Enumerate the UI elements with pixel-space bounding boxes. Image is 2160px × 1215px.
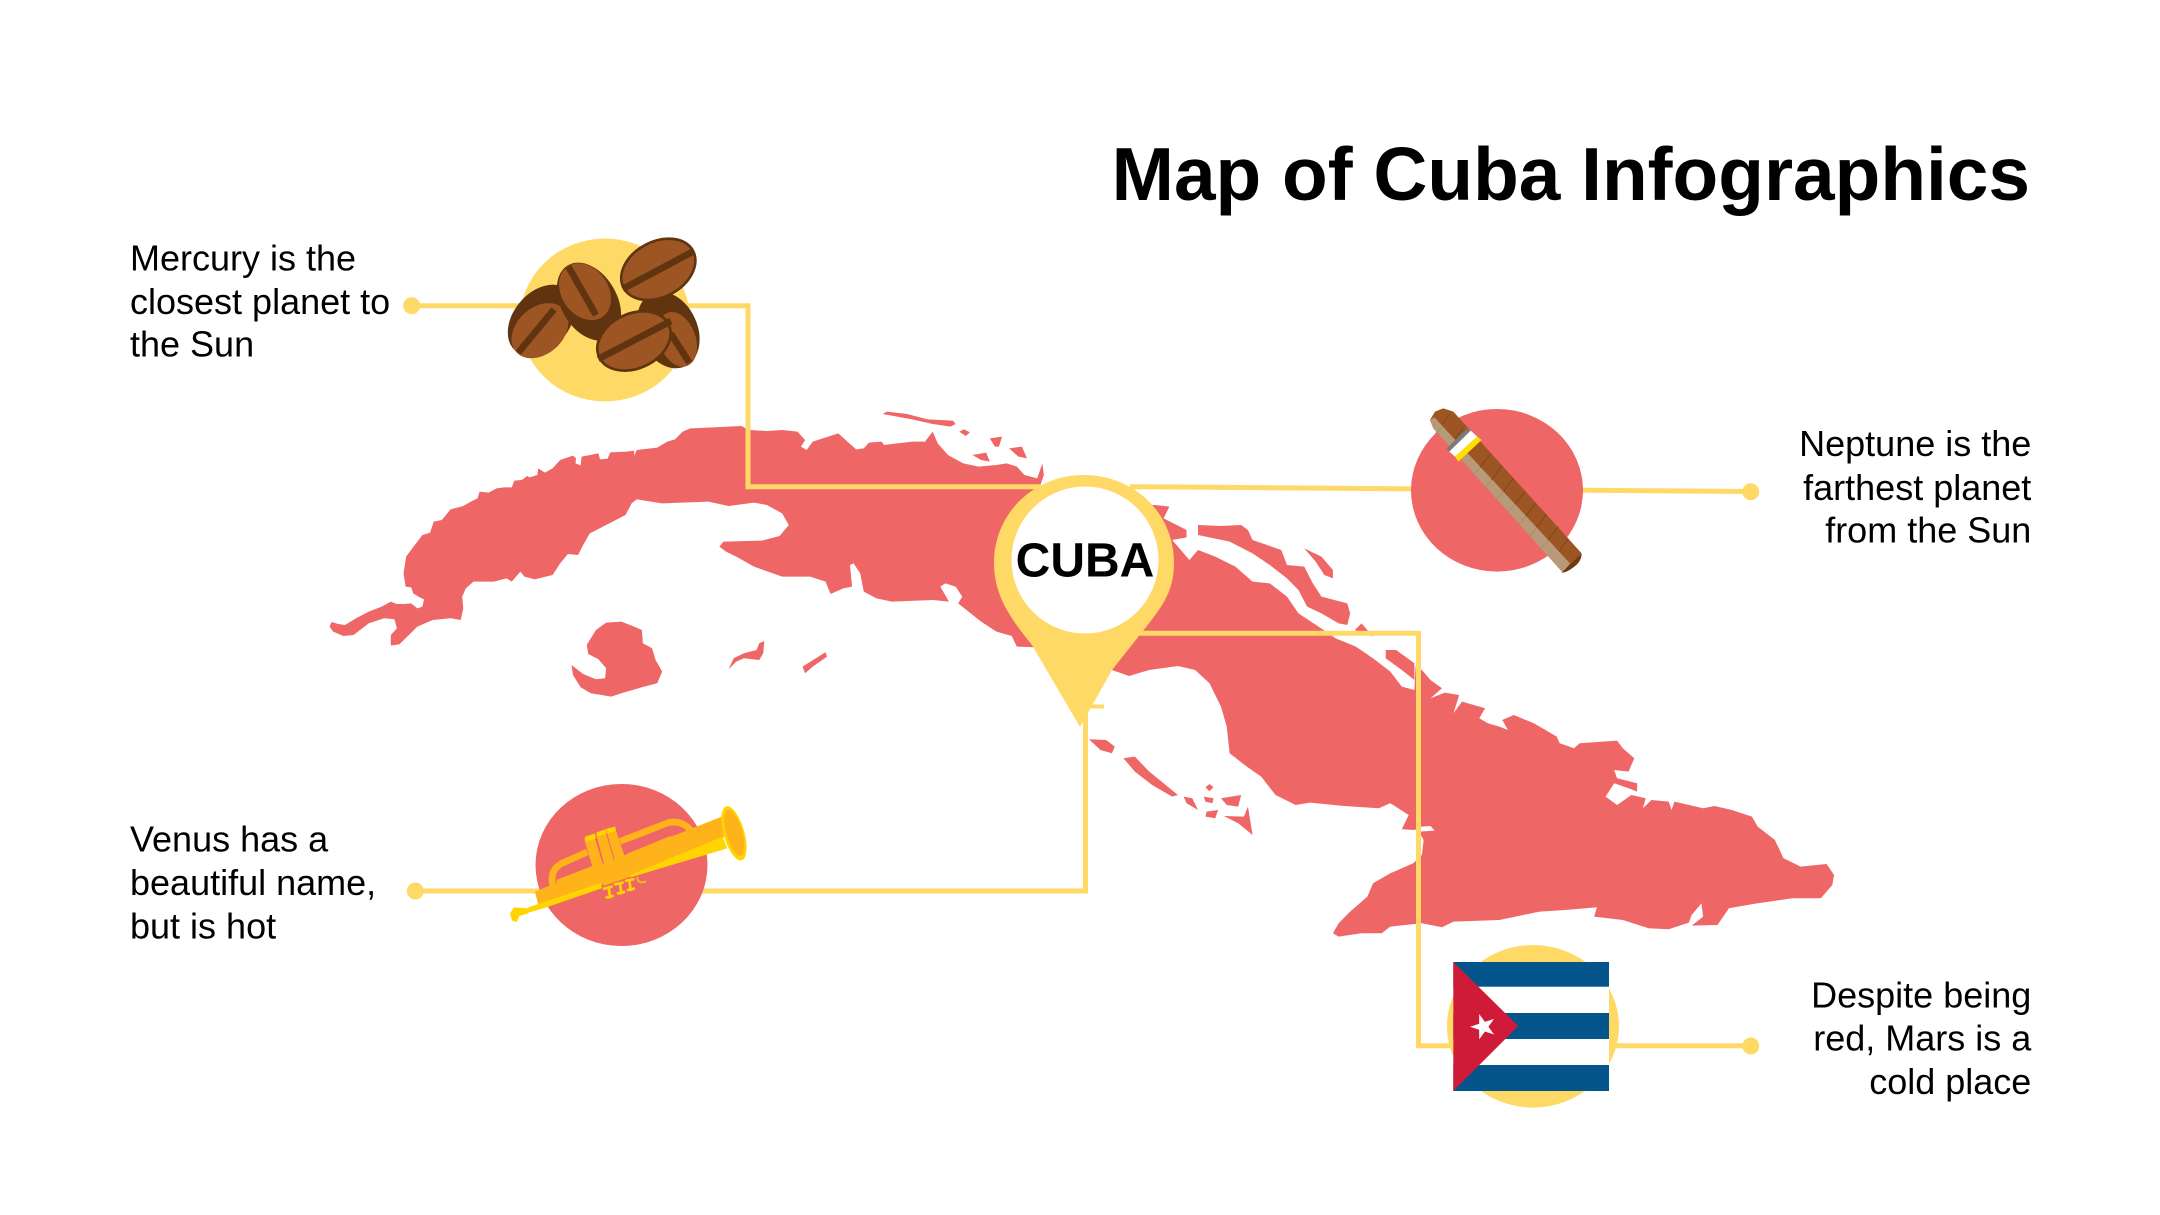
pin label: CUBA [1016, 534, 1154, 588]
western mainland [330, 426, 1100, 647]
Isle of Youth and small western islands [571, 412, 1027, 697]
title: Map of Cuba Infographics [1112, 132, 2030, 216]
valve keys [604, 879, 634, 897]
hook [637, 877, 646, 882]
main tube [535, 817, 724, 905]
connector lines [412, 306, 1750, 1046]
eastern mainland [1069, 483, 1834, 937]
valves [584, 827, 626, 872]
pin stub tick [1085, 704, 1104, 708]
line: Mars [1130, 633, 1750, 1046]
text: Neptune: Neptune is the [1799, 423, 2031, 464]
pin body [994, 475, 1174, 727]
map of Cuba [330, 412, 1834, 937]
text: Venus: Venus has a [130, 819, 328, 860]
circle: flag [1447, 945, 1619, 1108]
northern and southern keys [1089, 525, 1414, 835]
text: Venus: but is hot [130, 905, 276, 946]
flag [1453, 962, 1609, 1091]
dot: Venus [407, 882, 424, 900]
text: Mercury: the Sun [130, 324, 254, 365]
dot: Neptune [1742, 483, 1759, 500]
icon: coffee beans [496, 226, 710, 402]
icon: Cuban flag [1447, 945, 1619, 1108]
cigar [1430, 408, 1582, 573]
tubing loop [552, 822, 693, 885]
text: Mercury: closest planet to [130, 281, 390, 322]
line: Neptune [1130, 487, 1750, 492]
mouthpiece [510, 907, 529, 922]
text: Mars: red, Mars is a [1813, 1018, 2032, 1059]
circle: cigar [1411, 409, 1583, 572]
text: Neptune: from the Sun [1825, 510, 2031, 551]
icon: trumpet [510, 784, 752, 946]
text: Mars: cold place [1869, 1061, 2031, 1102]
location pin [994, 475, 1174, 727]
icon: cigar [1411, 408, 1583, 573]
bell [716, 804, 752, 863]
circle: coffee [520, 238, 690, 402]
text: Venus: beautiful name, [130, 862, 376, 903]
pin centre [1012, 486, 1158, 634]
line: Venus [415, 706, 1086, 891]
text: Neptune: farthest planet [1803, 467, 2031, 508]
beans [496, 226, 710, 382]
text: Mars: Despite being [1811, 974, 2031, 1015]
circle: trumpet [536, 784, 708, 946]
text: Mercury: Mercury is the [130, 238, 356, 279]
line: Mercury [412, 306, 1040, 487]
dot: Mars [1742, 1038, 1759, 1054]
connector end dots [403, 297, 1759, 1054]
trumpet [510, 804, 752, 922]
dot: Mercury [403, 297, 420, 314]
